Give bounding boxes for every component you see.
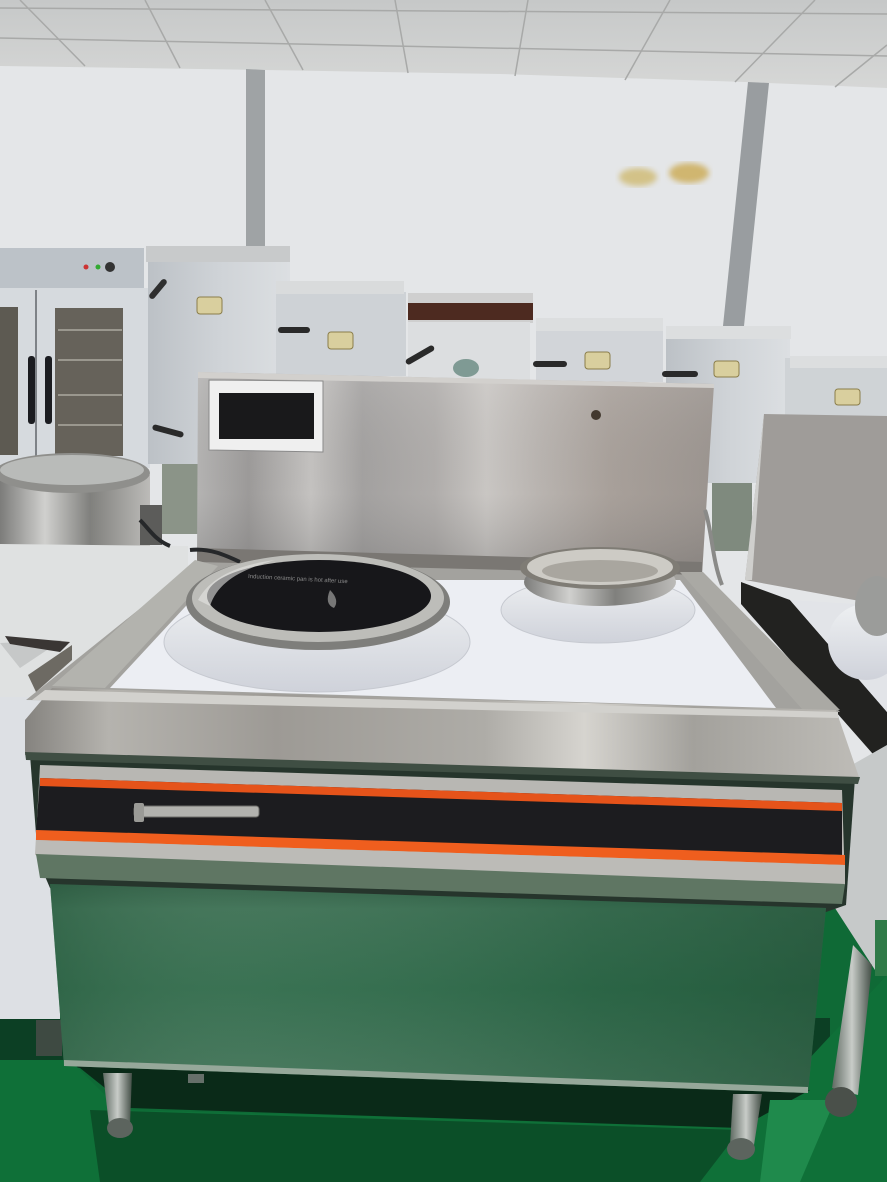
wall columns and stains <box>246 69 769 326</box>
orange stripes <box>40 778 842 811</box>
glass door cabinet <box>0 248 150 468</box>
left side white prep counter <box>0 544 188 1056</box>
right rim rail <box>680 572 840 710</box>
wok label text: Induction ceramic pan is hot after use <box>248 574 348 585</box>
cabinet 5 <box>666 328 790 483</box>
control knob bar <box>134 803 259 822</box>
cabinet 4 <box>536 320 663 382</box>
range cooktop <box>26 560 840 712</box>
green drawer front <box>50 884 826 1093</box>
ceiling tiles <box>0 0 887 88</box>
backsplash display panel <box>209 380 323 452</box>
right side neighbouring range <box>741 414 887 1117</box>
cabinet 6 <box>785 358 887 418</box>
range legs <box>103 1073 762 1160</box>
stock pot <box>0 453 162 547</box>
stainless backsplash <box>197 372 714 578</box>
cabinet 3 red top <box>408 293 533 323</box>
stainless front lip <box>25 688 860 784</box>
cabinet 1 <box>148 248 290 464</box>
control panel band <box>35 765 845 904</box>
right burner with steel pan <box>501 547 695 643</box>
steam cabinets row <box>0 246 887 551</box>
pipes behind range <box>140 510 722 585</box>
cabinet 2 <box>276 292 406 376</box>
left rim rail <box>52 560 218 688</box>
range body shadow <box>30 755 855 912</box>
left induction wok burner <box>164 554 470 692</box>
green floor <box>0 900 887 1182</box>
